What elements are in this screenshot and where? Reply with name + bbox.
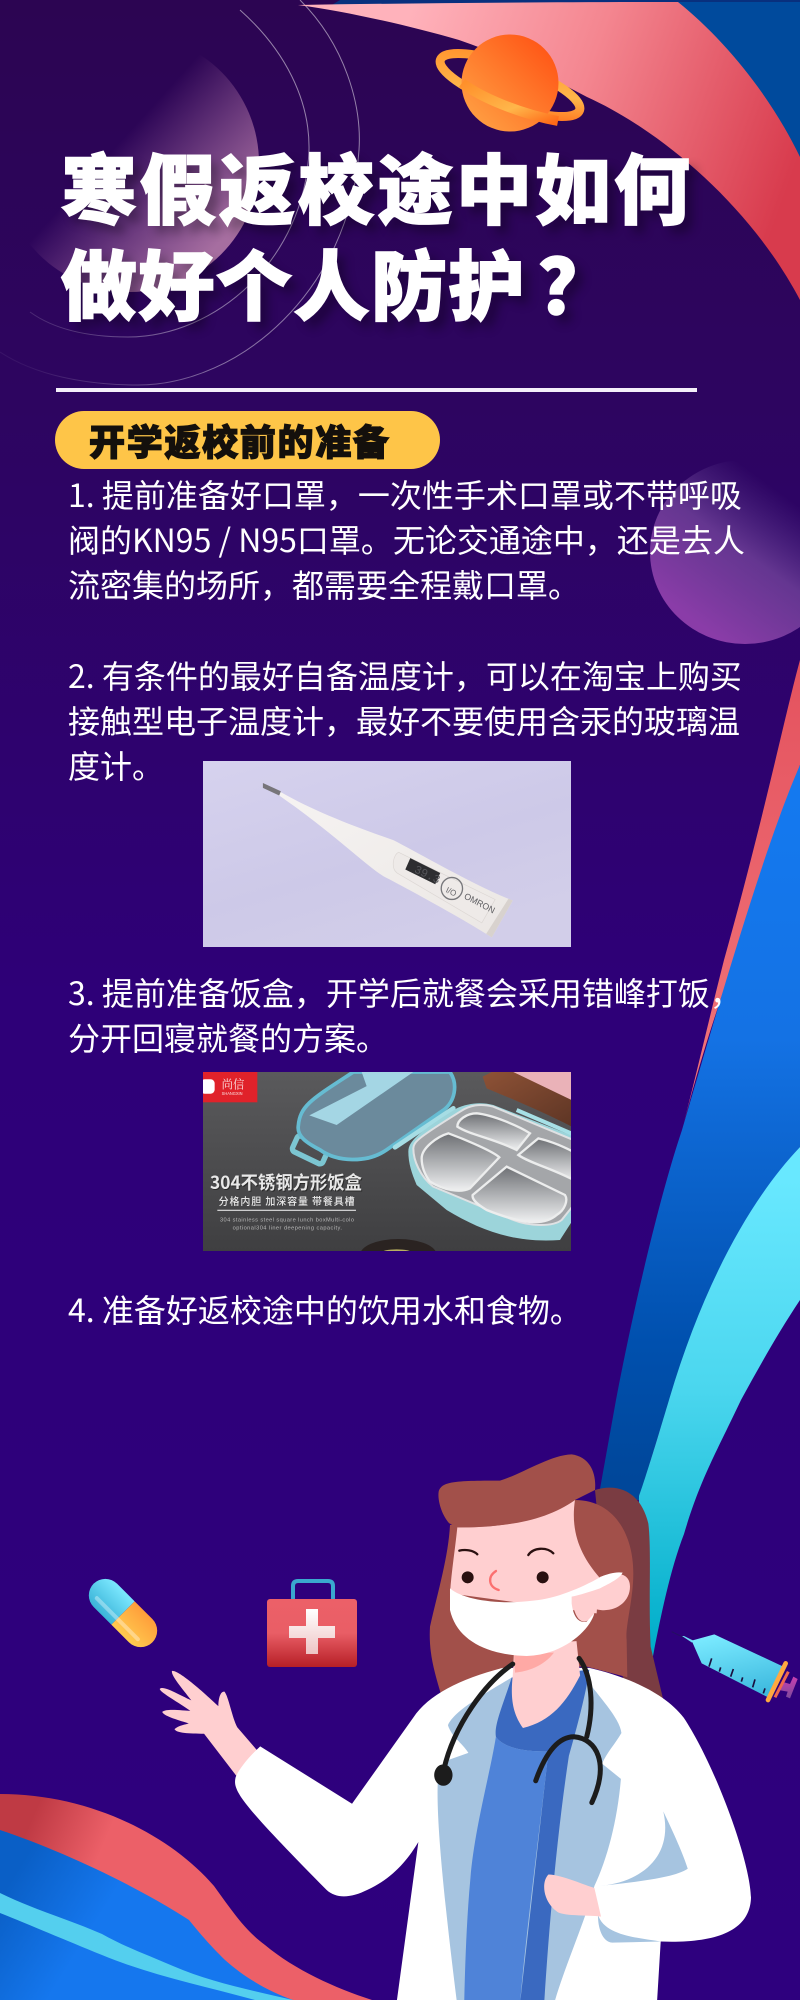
- doctor: body: [160, 1641, 751, 2000]
- doctor: eyes: [462, 1571, 549, 1583]
- text: item 3: [68, 969, 742, 1060]
- doctor: scrubs light panel: [464, 1737, 548, 2000]
- doctor: fringe hair: [438, 1454, 595, 1527]
- doctor: face: [450, 1500, 599, 1613]
- doctor: white coat: [235, 1668, 751, 2000]
- photo: digital thermometer: I/O: [444, 885, 458, 898]
- doctor: lower hand: [544, 1875, 601, 1917]
- doctor: neck: [512, 1641, 580, 1728]
- photo: digital thermometer: OMRON: [463, 891, 497, 915]
- divider line: [56, 388, 697, 392]
- doctor: back hair: [595, 1488, 663, 1700]
- doctor: side hair: [430, 1500, 633, 1693]
- doctor: ear: [572, 1574, 630, 1621]
- doctor: neck shadow: [514, 1653, 554, 1673]
- photo: stainless steel lunch box: 304 stainless steel square lunch boxMulti-colo: [220, 1217, 354, 1224]
- photo: stainless steel lunch box: SHANGXIN: [222, 1091, 243, 1096]
- icon: first aid kit: [267, 1579, 357, 1667]
- doctor: head: [438, 1454, 630, 1673]
- text: item 2: 接触型电子温度计，最好不要使用含汞的玻璃温: [68, 697, 740, 743]
- photo: stainless steel lunch box: [203, 1072, 571, 1251]
- title: [60, 130, 701, 336]
- title: 寒假返校途中如何: [61, 130, 693, 240]
- icon: syringe: [672, 1632, 798, 1702]
- text: item 2: 度计。: [68, 742, 164, 788]
- doctor: coat fold: [599, 1811, 688, 1886]
- text: item 3: 分开回寝就餐的方案。: [68, 1014, 388, 1060]
- photo: stainless steel lunch box: 304不锈钢方形饭盒: [210, 1170, 362, 1195]
- photo: stainless steel lunch box: 分格内胆 加深容量 带餐具槽: [219, 1193, 355, 1208]
- photo: digital thermometer: 39.3: [412, 864, 442, 888]
- text: item 2: [68, 652, 742, 788]
- icon: orange ringed planet: [436, 34, 584, 132]
- text: item 4: 4. 准备好返校途中的饮用水和食物。: [68, 1286, 582, 1332]
- section heading text: 开学返校前的准备: [89, 414, 391, 466]
- title: 做好个人防护？: [61, 226, 617, 336]
- doctor: coat lapels: [438, 1677, 621, 2000]
- text: item 3: 3. 提前准备饭盒，开学后就餐会采用错峰打饭，: [68, 969, 742, 1015]
- photo: digital thermometer: [203, 761, 571, 947]
- doctor: eyebrows: [459, 1549, 553, 1555]
- doctor: sleeve cuff: [598, 1915, 661, 1943]
- text: item 1: [68, 471, 745, 607]
- photo: stainless steel lunch box: optional304 liner deepening capacity.: [233, 1225, 342, 1231]
- photo: stainless steel lunch box: 304不锈钢方形饭盒: [211, 1171, 363, 1196]
- doctor: nose: [490, 1571, 499, 1590]
- text: item 1: 阀的KN95 / N95口罩。无论交通途中，还是去人: [68, 516, 745, 562]
- doctor: raised arm and hand: [160, 1671, 260, 1777]
- text: item 1: 1. 提前准备好口罩，一次性手术口罩或不带呼吸: [68, 471, 742, 517]
- doctor: stethoscope: [434, 1658, 600, 1803]
- doctor: surgical mask: [450, 1572, 623, 1656]
- icon: capsule pill: [88, 1578, 158, 1648]
- doctor: scrubs dark panel: [496, 1670, 589, 2000]
- text: item 1: 流密集的场所，都需要全程戴口罩。: [68, 561, 580, 607]
- illustration: masked doctor in white coat: [160, 1454, 751, 2000]
- text: item 2: 2. 有条件的最好自备温度计，可以在淘宝上购买: [68, 652, 742, 698]
- section heading pill: [55, 411, 440, 469]
- photo: stainless steel lunch box: 尚信: [222, 1076, 245, 1093]
